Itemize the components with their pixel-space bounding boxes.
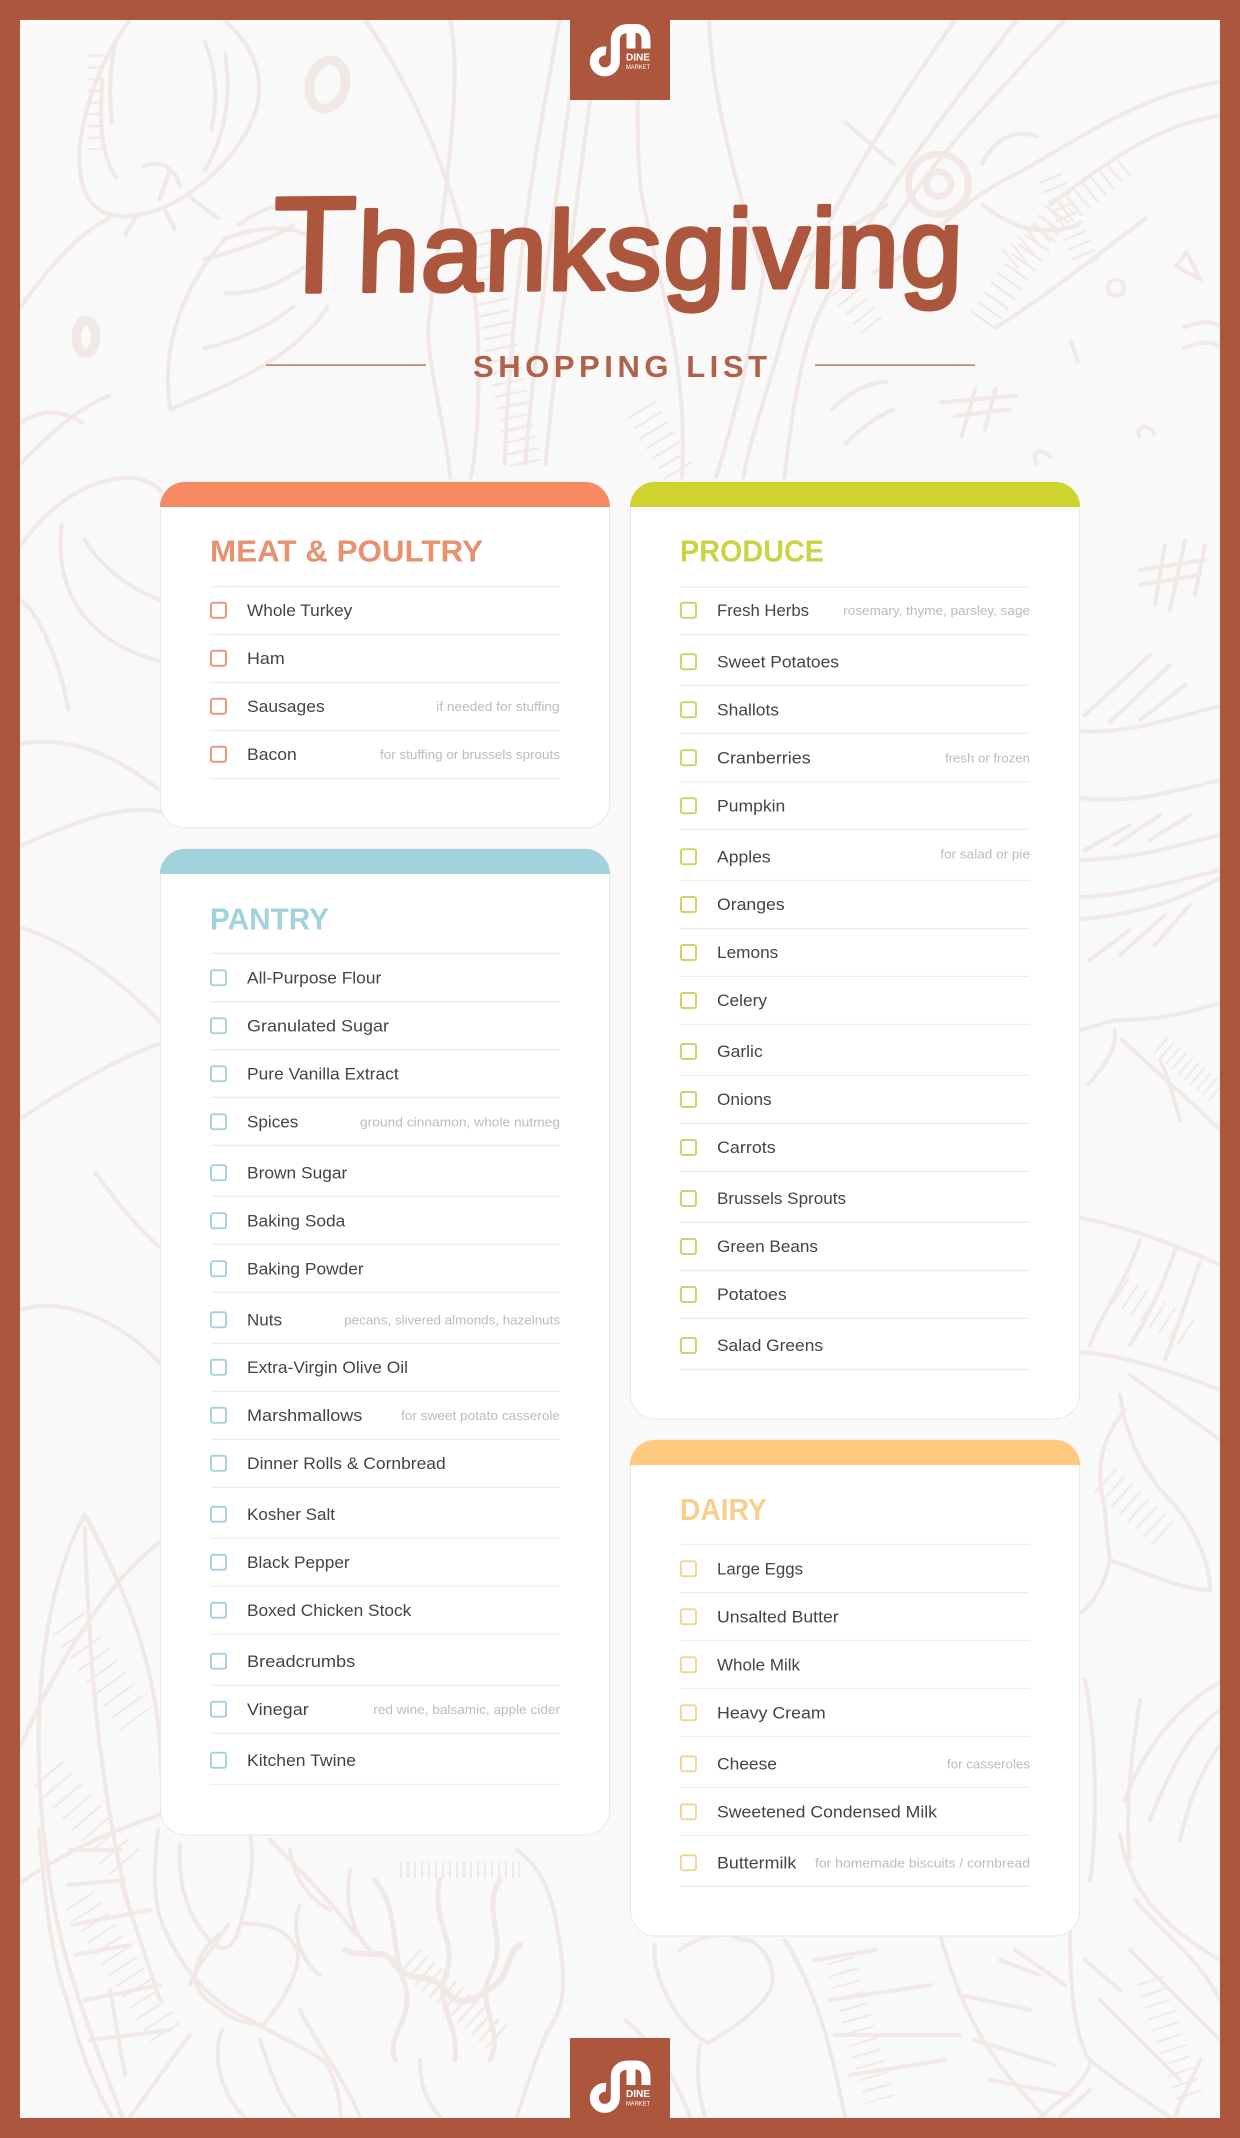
list: pantry items: for sweet potato casserole (401, 1408, 560, 1423)
list: pantry items: pecans, slivered almonds, hazelnuts (344, 1312, 561, 1327)
list: pantry items: Kitchen Twine (247, 1751, 356, 1770)
subtitle: shopping list with rules: SHOPPING LIST (473, 349, 767, 384)
list: meat and poultry items: Ham (247, 649, 285, 668)
list: produce items: for salad or pie (940, 846, 1030, 861)
list: produce items: Onions (717, 1090, 772, 1109)
list: pantry items: All-Purpose Flour (247, 968, 382, 987)
heading: dairy: DAIRY (680, 1493, 767, 1527)
list: produce items: Green Beans (717, 1237, 818, 1256)
list: produce items: Cranberries (717, 748, 811, 767)
list: pantry items: Extra-Virgin Olive Oil (247, 1358, 408, 1377)
list: produce items: Garlic (717, 1042, 763, 1061)
bottom logo badge (570, 2038, 670, 2120)
list: pantry items: Dinner Rolls & Cornbread (247, 1454, 446, 1473)
list: pantry items (210, 953, 561, 1784)
list: produce items: Carrots (717, 1138, 776, 1157)
list: produce items: fresh or frozen (945, 750, 1030, 765)
list: produce items: Apples (717, 847, 771, 866)
list: dairy items: for homemade biscuits / cornbread (815, 1855, 1030, 1870)
list: dairy items: Buttermilk (717, 1853, 797, 1872)
title: Thanksgiving (271, 163, 965, 321)
panel: produce (630, 482, 1080, 1419)
list: pantry items: ground cinnamon, whole nutmeg (360, 1114, 560, 1129)
list: produce items (680, 587, 1030, 1369)
list: meat and poultry items: if needed for stuffing (436, 699, 560, 714)
bottom logo badge: DINE (626, 2089, 650, 2100)
list: pantry items: Nuts (247, 1310, 282, 1329)
list: pantry items: Black Pepper (247, 1553, 350, 1572)
list: produce items: Pumpkin (717, 796, 785, 815)
list: produce items: Shallots (717, 700, 779, 719)
list: produce items: Lemons (717, 943, 778, 962)
list: dairy items: Cheese (717, 1754, 777, 1773)
list: meat and poultry items (210, 587, 561, 778)
list: pantry items: Kosher Salt (247, 1505, 335, 1524)
list: meat and poultry items: Whole Turkey (247, 601, 353, 620)
list: pantry items: Boxed Chicken Stock (247, 1601, 412, 1620)
top logo badge (570, 20, 670, 100)
list: pantry items: red wine, balsamic, apple cider (373, 1702, 561, 1717)
list: produce items: rosemary, thyme, parsley, sage (843, 603, 1030, 618)
list: dairy items (680, 1544, 1031, 1886)
list: produce items: Brussels Sprouts (717, 1189, 846, 1208)
heading: pantry: PANTRY (210, 902, 329, 936)
list: pantry items: Spices (247, 1112, 298, 1131)
panel: pantry (160, 849, 610, 1835)
list: pantry items: Baking Soda (247, 1211, 346, 1230)
top logo badge: DINE (626, 53, 650, 64)
list: produce items: Celery (717, 991, 768, 1010)
list: pantry items: Vinegar (247, 1700, 309, 1719)
panel: meat and poultry (160, 482, 610, 828)
list: produce items: Sweet Potatoes (717, 652, 839, 671)
list: pantry items: Pure Vanilla Extract (247, 1064, 399, 1083)
list: pantry items: Baking Powder (247, 1259, 364, 1278)
list: dairy items: Whole Milk (717, 1655, 800, 1674)
list: pantry items: Granulated Sugar (247, 1016, 389, 1035)
panel: dairy (630, 1440, 1080, 1936)
list: dairy items: Large Eggs (717, 1559, 803, 1578)
heading: produce: PRODUCE (680, 535, 824, 569)
top logo badge: MARKET (626, 64, 650, 71)
list: meat and poultry items: Sausages (247, 697, 325, 716)
list: meat and poultry items: Bacon (247, 745, 297, 764)
list: pantry items: Brown Sugar (247, 1163, 348, 1182)
list: pantry items: Marshmallows (247, 1406, 362, 1425)
list: dairy items: Heavy Cream (717, 1703, 826, 1722)
list: meat and poultry items: for stuffing or brussels sprouts (380, 747, 561, 762)
heading: meat and poultry: MEAT & POULTRY (210, 535, 483, 569)
list: produce items: Potatoes (717, 1285, 787, 1304)
list: produce items: Fresh Herbs (717, 601, 809, 620)
list: dairy items: Unsalted Butter (717, 1607, 839, 1626)
list: pantry items: Breadcrumbs (247, 1652, 355, 1671)
list: produce items: Oranges (717, 895, 785, 914)
bottom logo badge: MARKET (626, 2100, 650, 2108)
list: produce items: Salad Greens (717, 1336, 823, 1355)
list: dairy items: for casseroles (947, 1756, 1031, 1771)
list: dairy items: Sweetened Condensed Milk (717, 1802, 938, 1821)
